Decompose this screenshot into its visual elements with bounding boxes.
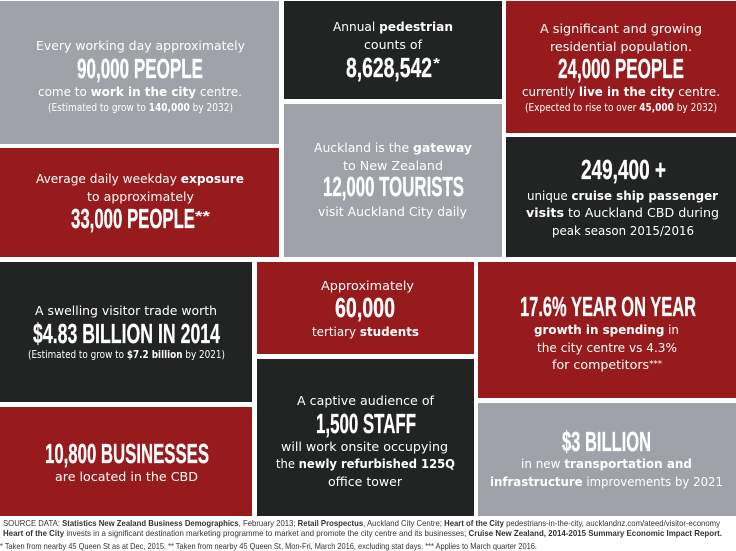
text: to new zealand: to New Zealand [343,158,443,173]
panel: tourists [284,104,502,257]
text: cruise line 1: unique cruise ship passenger [527,188,719,203]
heading: 10,800 businesses: 10,800 BUSINESSES [45,438,209,469]
text: cruise line 2: visits to Auckland CBD during [526,205,719,220]
panel: spending growth [478,262,736,398]
source line 1: SOURCE DATA: Statistics New Zealand Business Demographics, February 2013; Retail Prospectus, Auckland City Centre; Heart of the City pedestrians-in-the-city, aucklandnz.com/ateed/visitor-economy [3,518,721,528]
footnotes: * Taken from nearby 45 Queen St as at Dec, 2015. ** Taken from nearby 45 Queen St, Mon-Fri, March 2016, excluding stat days. *** Applies to March quarter 2016. [0,541,537,551]
source line 2: Heart of the City invests in a significant destination marketing programme to market and promote the city centre and its businesses; Cruise New Zealand, 2014-2015 Summary Economic Impact Report. [3,528,722,538]
panel: residents [506,1,736,133]
heading: $4.83 billion: $4.83 BILLION IN 2014 [33,318,220,349]
heading: 1,500 staff: 1,500 STAFF [316,408,416,439]
panel: visitor trade [0,262,252,402]
heading: 12,000 tourists: 12,000 TOURISTS [323,171,464,202]
text: to approximately: to approximately [87,189,195,204]
panel: exposure [0,148,279,257]
heading: 8,628,542: 8,628,542 [346,52,432,83]
text: counts of: counts of [364,37,423,52]
footnote mark: ** [195,208,210,225]
text: trade estimate: (Estimated to grow to $7.2 billion by 2021) [28,349,225,361]
footnote mark: * [433,55,440,72]
text: growth line 2: the city centre vs 4.3% [537,340,677,355]
text: live in the city: currently live in the city centre. [522,84,720,99]
text: residents intro 2: residential population. [550,39,692,54]
heading: 60,000: 60,000 [335,292,395,323]
text: transport line 2: infrastructure improvements by 2021 [490,474,723,489]
text: growth line 3: for competitors [552,357,648,372]
panel: workers [0,1,279,144]
text: captive audience: A captive audience of [297,393,435,408]
text: expected rise: (Expected to rise to over 45,000 by 2032) [525,102,717,114]
text: growth line 1: growth in spending in [534,322,679,337]
heading: 90,000 people: 90,000 PEOPLE [77,53,203,84]
text: swelling trade: A swelling visitor trade worth [35,303,217,318]
text: located in cbd: are located in the CBD [55,469,198,484]
text: cruise line 3: peak season 2015/2016 [552,223,694,238]
text: approximately: Approximately [321,278,415,293]
footer: sources and footnotes [0,518,722,551]
text: staff line 2: the newly refurbished 125Q [276,456,455,471]
text: growth line 3: *** [649,360,662,370]
text: tertiary students: tertiary students [312,324,419,339]
text: gateway: Auckland is the gateway [314,140,472,155]
heading: 249,400 +: 249,400 + [581,154,666,185]
text: exposure intro: Average daily weekday exposure [36,171,244,186]
panel: students [257,262,474,354]
text: staff line 1: will work onsite occupying [281,439,448,454]
text: intro: Every working day approximately [36,38,246,53]
text: estimate: (Estimated to grow to 140,000 by 2032) [48,102,233,114]
panel: cruise visits [506,137,736,257]
text: transport line 1: in new transportation and [521,456,692,471]
panel: businesses [0,407,252,516]
text: residents intro 1: A significant and growing [540,21,702,36]
text: work in the city: come to work in the city centre. [38,84,242,99]
heading: 33,000 people: 33,000 PEOPLE [71,203,195,234]
panel: transport investment [478,403,736,516]
text: visit daily: visit Auckland City daily [318,204,468,219]
heading: $3 billion: $3 BILLION [562,426,651,457]
panel: staff [257,359,474,516]
text: staff line 3: office tower [328,474,403,489]
panel: pedestrian counts [284,1,502,99]
text: annual pedestrian: Annual pedestrian [333,19,453,34]
